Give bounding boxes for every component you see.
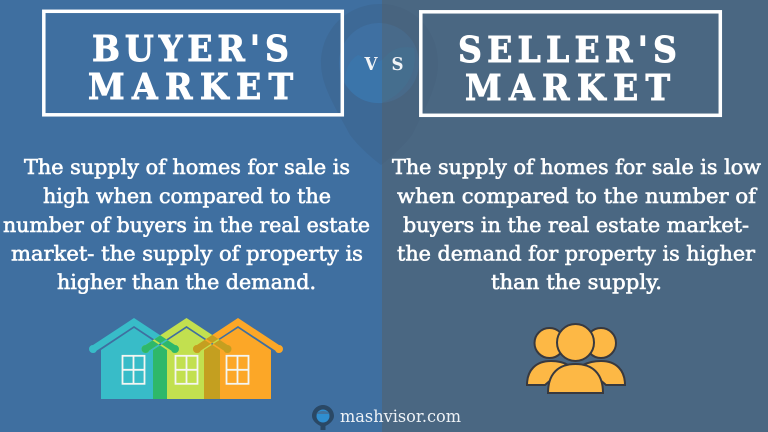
text block: buyer's market definition: The supply of homes for sale is bbox=[24, 155, 350, 179]
panel: seller's market background bbox=[382, 0, 768, 432]
text block: seller's market definition bbox=[392, 155, 761, 294]
vs label: V bbox=[364, 54, 378, 75]
heading box: buyer's market: MARKET bbox=[88, 67, 293, 108]
heading box: seller's market bbox=[421, 12, 720, 115]
vs label: S bbox=[392, 54, 404, 75]
heading box: seller's market: MARKET bbox=[465, 68, 670, 109]
icon: logo pin bbox=[312, 405, 334, 430]
text block: seller's market definition: the demand for property is higher bbox=[397, 242, 755, 266]
text block: seller's market definition: The supply of homes for sale is low bbox=[392, 155, 761, 179]
heading line: seller's: SELLER'S bbox=[458, 30, 677, 71]
watermark: map pin behind vs bbox=[321, 4, 415, 164]
text block: buyer's market definition: number of buyers in the real estate bbox=[3, 213, 370, 237]
text block: seller's market definition: when compared to the number of bbox=[397, 184, 757, 208]
text block: buyer's market definition bbox=[3, 155, 370, 294]
text block: buyer's market definition: market- the supply of property is bbox=[11, 242, 363, 266]
logo text: mashvisor.com bbox=[340, 407, 461, 427]
icon: group of three people bbox=[527, 324, 625, 393]
heading box: buyer's market bbox=[44, 11, 342, 115]
text block: seller's market definition: than the supply. bbox=[491, 270, 662, 294]
text block: buyer's market definition: higher than the demand. bbox=[57, 270, 316, 294]
panel: buyer's market background bbox=[0, 0, 382, 432]
text block: buyer's market definition: high when compared to the bbox=[43, 184, 331, 208]
text block: seller's market definition: buyers in the real estate market- bbox=[403, 213, 749, 237]
icon: row of three houses bbox=[89, 318, 283, 399]
heading line: buyer's: BUYER'S bbox=[92, 29, 289, 70]
logo: mashvisor bbox=[312, 405, 461, 430]
vs label bbox=[364, 54, 404, 75]
